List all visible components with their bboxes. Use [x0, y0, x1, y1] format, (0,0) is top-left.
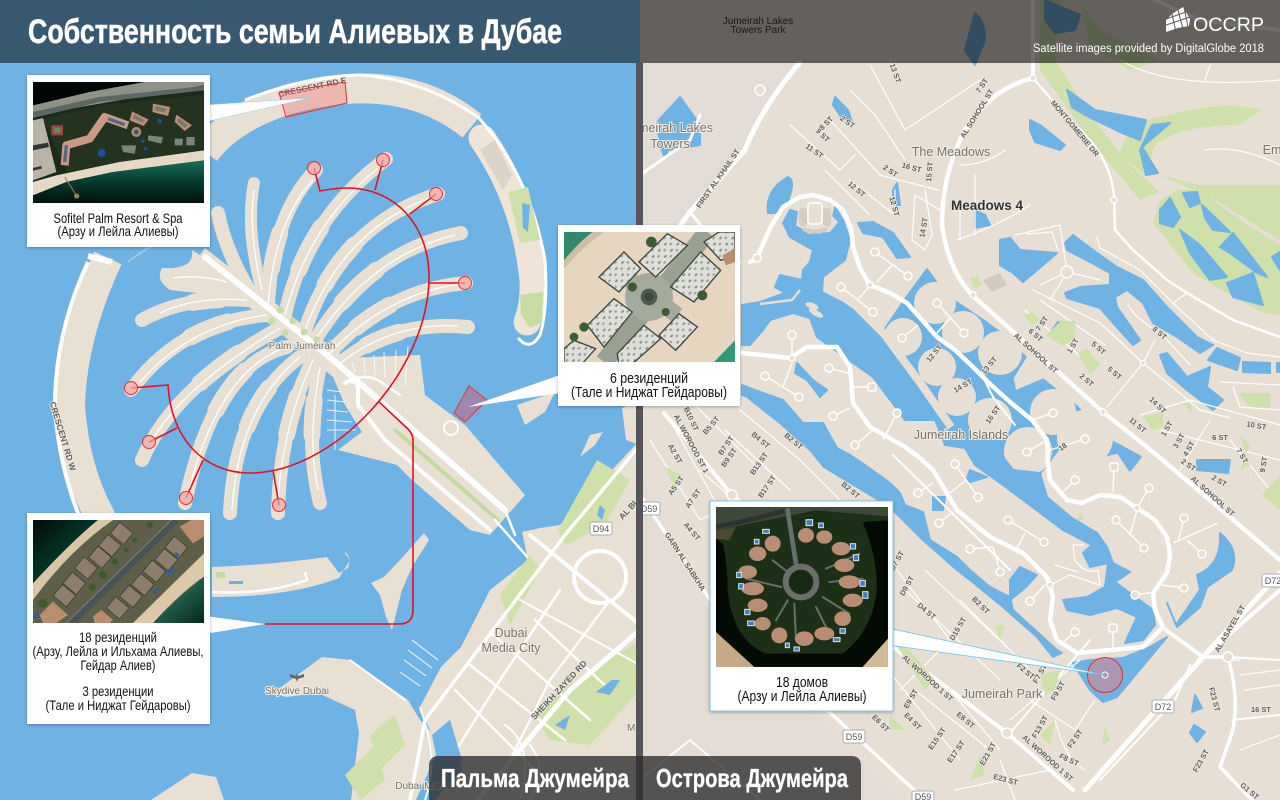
street labels: E8 ST: [955, 710, 977, 730]
street labels: E9 ST: [902, 687, 920, 710]
street labels: MONTGOMERIE DR: [1049, 99, 1101, 159]
right map place labels: The Meadows: [912, 145, 990, 159]
caption: villas: 3 резиденции: [82, 683, 154, 699]
street labels: B4 ST: [750, 430, 772, 451]
caption: houses: (Арзу и Лейла Алиевы): [738, 688, 866, 705]
street labels: F23 ST: [1207, 686, 1222, 713]
street labels: 12 ST: [887, 196, 901, 218]
street labels: 5 ST: [1106, 365, 1124, 382]
street labels: E17 ST: [945, 738, 967, 764]
street labels: A7 ST: [683, 487, 703, 510]
street labels: AL WOROOD ST 1: [672, 413, 711, 475]
palm frond tips: [182, 220, 406, 440]
harbour islets and stadium: [760, 203, 838, 320]
caption: Sofitel: Sofitel Palm Resort & Spa: [54, 210, 183, 226]
left map labels: Media City: [481, 641, 541, 655]
left map labels: Ma: [627, 723, 641, 734]
right map place labels: Towers: [650, 137, 690, 151]
street labels: E21 ST: [978, 740, 998, 767]
street labels: 5 ST: [1090, 340, 1108, 357]
palm fronds: [131, 159, 468, 513]
street labels: AL WOROOD 1 ST: [900, 653, 955, 704]
street labels: B7 ST: [716, 434, 736, 457]
street labels: F23 ST: [1191, 747, 1211, 774]
caption: villas: 18 резиденций: [79, 629, 157, 645]
street labels: E23 ST: [992, 772, 1019, 787]
street labels: 10 ST: [1246, 419, 1267, 432]
minor streets: [650, 60, 1280, 800]
street labels: 2 ST: [1179, 457, 1198, 473]
street labels: 16 ST: [984, 403, 1003, 425]
card: 6 residences: [558, 225, 740, 406]
right map place labels: [631, 16, 1280, 701]
left map labels: [48, 75, 641, 792]
street labels: 1 ST: [1065, 336, 1081, 355]
street labels: F8 ST: [1058, 751, 1081, 768]
red selection: Sofitel plot: [279, 82, 347, 117]
crescent breakwater: [55, 75, 546, 535]
right map place labels: Jumeirah Lakes: [723, 16, 793, 27]
road signs: [636, 502, 1280, 800]
street labels: A5 ST: [666, 474, 686, 497]
palm trunk land: [195, 248, 525, 535]
satellite photo: island: [716, 507, 888, 667]
street labels: 7 ST: [974, 76, 990, 95]
satellite photo: villas: [33, 520, 204, 623]
street labels: 3 ST: [1171, 431, 1187, 450]
street labels: 7 ST: [1034, 314, 1050, 333]
satellite photo: Sofitel: [33, 82, 204, 203]
street labels: 2 ST: [1078, 372, 1096, 389]
street labels: 12 ST: [924, 343, 944, 364]
street labels: 12 ST: [846, 179, 867, 199]
street labels: 9 ST: [1258, 456, 1269, 473]
street labels: 9 ST: [814, 126, 832, 144]
palm spine roads: [205, 257, 530, 560]
street labels: B10 ST: [682, 406, 701, 433]
street labels: D7 ST: [888, 549, 906, 572]
header: left title bar: [0, 0, 640, 63]
vertical divider: [636, 63, 643, 800]
bottom label plate: [429, 756, 861, 800]
street labels: F2 ST: [1015, 661, 1037, 681]
left map labels: AL BI: [617, 498, 639, 522]
street labels: 1 ST: [1159, 419, 1175, 438]
street labels: 11 ST: [1127, 415, 1148, 435]
street labels: 16 ST: [901, 161, 923, 175]
street labels: 14 ST: [917, 217, 930, 238]
left map labels: Palm Jumeirah: [269, 341, 335, 352]
caption: residences: 6 резиденций: [610, 370, 688, 387]
Jumeirah Islands water: main channel: [742, 207, 1155, 643]
Jumeirah Islands water: south-west channel: [742, 385, 1062, 657]
OCCRP logo: [1166, 7, 1264, 36]
street labels: B2 ST: [783, 431, 805, 452]
street labels: AL ASAYEL ST: [1213, 603, 1247, 654]
street labels: 6 ST: [1212, 433, 1228, 442]
caption: Sofitel: [54, 210, 183, 239]
red selection: Jumeirah Islands circle: [1088, 658, 1122, 692]
card: Sofitel Palm Resort & Spa: [27, 75, 210, 247]
street labels: E6 ST: [870, 713, 892, 734]
street labels: 14 ST: [1148, 395, 1168, 416]
caption: villas: Гейдар Алиев): [80, 657, 156, 673]
label: Jumeirah Islands: Острова Джумейра: [656, 763, 848, 793]
street labels: F9 ST: [1049, 679, 1067, 702]
caption: villas: [32, 629, 204, 713]
street labels: 13 ST: [888, 62, 903, 84]
mainland water: [432, 505, 640, 775]
street labels: 16 ST: [1251, 705, 1271, 714]
street labels: E15 ST: [926, 725, 948, 751]
street labels: 15 ST: [924, 161, 935, 182]
street labels: B5 ST: [701, 414, 722, 436]
satellite photo: residences: [564, 232, 735, 365]
OCCRP logo: OCCRP: [1193, 14, 1264, 36]
left map labels: CRESCENT RD E: [277, 75, 348, 99]
left map labels: CRESCENT RD W: [48, 400, 78, 473]
red leader lines and frond markers: [124, 154, 472, 624]
map: Palm Jumeirah: [49, 73, 636, 800]
right map place labels: Meadows 4: [951, 198, 1023, 213]
street labels: 8 ST: [817, 114, 835, 132]
caption: houses: [738, 674, 866, 705]
marina: [327, 346, 408, 450]
left map labels: Dubai: [495, 626, 527, 640]
street labels: F2 ST: [1065, 727, 1085, 750]
street labels: E4 ST: [902, 711, 924, 732]
land strip along channel: [880, 328, 954, 429]
label: Palm Jumeirah: Пальма Джумейра: [441, 763, 629, 793]
street labels: AL SOHOOL ST: [1012, 331, 1060, 375]
street labels: F13 ST: [1030, 713, 1050, 740]
golf course green: [1040, 0, 1280, 315]
street labels: 13 ST: [979, 355, 999, 376]
street labels: B17 ST: [756, 473, 778, 500]
street labels: F7 ST: [1031, 662, 1049, 685]
left map labels: Skydive Dubai: [265, 686, 329, 697]
street labels: B2 ST: [970, 595, 992, 616]
right map place labels: Jumeirah Islands: [914, 428, 1008, 442]
title: Собственность семьи Алиевых в Дубае: [28, 13, 562, 51]
road signs: D72: [1155, 702, 1171, 712]
street labels: D4 ST: [916, 601, 938, 622]
caption: villas: (Арзу, Лейла и Ильхама Алиевы,: [32, 643, 204, 659]
card: 18 and 3 residences: [27, 513, 210, 724]
right map place labels: Towers Park: [730, 25, 787, 36]
street labels: 2 ST: [838, 114, 857, 130]
street labels: 6 ST: [1027, 327, 1045, 344]
street labels: AL SOHOOL ST: [958, 87, 996, 140]
street labels: AL WOROOD 1 ST: [1020, 733, 1075, 784]
right map place labels: Jumeirah Park: [962, 687, 1043, 701]
street labels: [663, 62, 1271, 800]
left map labels: D94: [593, 524, 609, 534]
street labels: A4 ST: [682, 520, 702, 543]
satellite credit: Satellite images provided by DigitalGlobe 2018: [1033, 43, 1264, 55]
street labels: B13 ST: [748, 450, 770, 477]
street labels: AL SOHOOL ST: [1189, 474, 1237, 518]
street labels: D9 ST: [898, 574, 916, 597]
street labels: D15 ST: [948, 615, 968, 642]
lakes: [657, 0, 1280, 742]
caption: residences: (Тале и Ниджат Гейдаровы): [571, 384, 727, 401]
road signs: D59: [846, 732, 862, 742]
street labels: GARN AL SABKHA: [663, 531, 708, 593]
road signs: D59: [641, 504, 657, 514]
caption: residences: [571, 370, 727, 401]
island lobes: [884, 282, 1113, 475]
street labels: 7 ST: [1234, 447, 1250, 465]
street labels: 18: [1057, 441, 1069, 453]
roads: [640, 0, 1280, 800]
card: 18 houses: [710, 501, 893, 711]
cul-de-sac spokes: [765, 252, 1218, 648]
street labels: B2 ST: [840, 480, 862, 501]
street labels: 11 ST: [804, 142, 825, 160]
lower palm islands: [212, 552, 350, 597]
street labels: 4 ST: [1181, 439, 1197, 458]
map: Jumeirah Islands: [631, 0, 1280, 800]
callout pointers: [205, 98, 1105, 675]
caption: villas: (Тале и Ниджат Гейдаровы): [46, 697, 190, 713]
Jumeirah Islands water: north-east band: [880, 270, 1140, 473]
street labels: 8 ST: [1151, 325, 1169, 342]
mainland roads: [350, 445, 640, 800]
green park strips on crescent: [508, 187, 540, 243]
street labels: B9 ST: [719, 446, 739, 469]
caption: Sofitel: (Арзу и Лейла Алиевы): [58, 223, 178, 239]
left map labels: Dubai Marina: [395, 781, 455, 792]
street labels: A2 ST: [666, 442, 685, 466]
street labels: 14 ST: [952, 377, 974, 395]
street labels: 2 ST: [881, 163, 900, 179]
right map place labels: umeirah Lakes: [631, 121, 713, 135]
small parks: [665, 276, 1280, 780]
caption: houses: 18 домов: [776, 674, 828, 691]
mainland: [420, 440, 640, 800]
street labels: FIRST AL KHAIL ST: [694, 147, 742, 210]
red selection: Tale and Nijat plot: [454, 386, 487, 422]
street labels: 2 ST: [1210, 473, 1229, 489]
left map labels: SHEIKH ZAYED RD: [529, 658, 589, 722]
header: right translucent bar: [640, 0, 1280, 63]
